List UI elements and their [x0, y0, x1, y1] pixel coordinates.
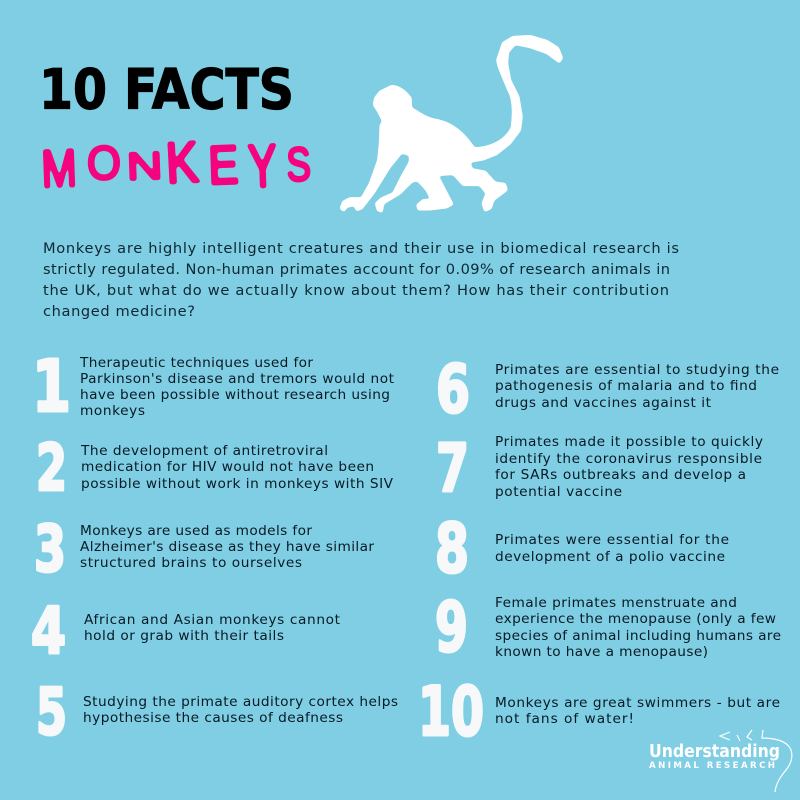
fact 7: [436, 430, 763, 507]
fact 1: monkeys: [80, 403, 145, 419]
fact 5: [36, 676, 398, 750]
fact 4: African and Asian monkeys cannot: [84, 612, 341, 628]
fact 2: possible without work in monkeys with SIV: [81, 476, 394, 492]
fact 4: hold or grab with their tails: [84, 628, 284, 644]
fact 8: 8: [435, 510, 469, 589]
fact 6: [436, 351, 779, 428]
fact 4: 4: [31, 595, 66, 669]
fact 6: Primates are essential to studying the: [495, 362, 779, 378]
fact 10: Monkeys are great swimmers - but are: [495, 695, 780, 711]
logo: Understanding Animal Research: [649, 730, 792, 792]
fact 6: drugs and vaccines against it: [495, 395, 712, 411]
fact 9: [435, 588, 781, 668]
fact 8: [435, 510, 729, 589]
fact 1: Therapeutic techniques used for: [79, 355, 313, 371]
intro text: the UK, but what do we actually know about them? How has their contribution: [43, 282, 669, 299]
intro text: Monkeys are highly intelligent creatures and their use in biomedical research is: [43, 240, 679, 257]
fact 9: Female primates menstruate and: [495, 595, 737, 611]
fact 3: structured brains to ourselves: [80, 555, 302, 571]
fact 10: not fans of water!: [495, 711, 634, 727]
intro text: [43, 240, 679, 320]
fact 3: [34, 513, 374, 587]
fact 1: have been possible without research using: [80, 387, 390, 403]
fact 2: [36, 432, 394, 506]
fact 10: [418, 673, 780, 752]
fact 7: potential vaccine: [495, 484, 622, 500]
fact 5: hypothesise the causes of deafness: [83, 710, 343, 726]
heading: monkeys: M: [40, 140, 78, 199]
fact 1: [32, 345, 395, 428]
fact 9: experience the menopause (only a few: [495, 611, 776, 627]
fact 6: 6: [436, 351, 470, 428]
heading: monkeys: S: [286, 138, 312, 191]
fact 7: for SARs outbreaks and develop a: [495, 467, 746, 483]
fact 1: Parkinson's disease and tremors would not: [80, 371, 395, 387]
fact 2: medication for HIV would not have been: [81, 459, 374, 475]
fact 6: pathogenesis of malaria and to find: [495, 378, 757, 394]
fact 7: 7: [436, 430, 469, 507]
intro text: strictly regulated. Non-human primates account for 0.09% of research animals in: [43, 261, 670, 278]
fact 10: 10: [418, 673, 484, 752]
icon: monkey silhouette: [341, 36, 562, 212]
fact 7: identify the coronavirus responsible: [495, 451, 762, 467]
fact 7: Primates made it possible to quickly: [495, 434, 763, 450]
heading: monkeys: Y: [247, 133, 278, 201]
fact 3: 3: [34, 513, 66, 587]
logo: Understanding Animal Research: Understanding: [649, 741, 780, 762]
title: 10 facts: 10 FACTS: [39, 58, 294, 122]
fact 5: Studying the primate auditory cortex helps: [83, 694, 398, 710]
fact 5: 5: [36, 676, 67, 750]
fact 3: Alzheimer's disease as they have similar: [80, 539, 374, 555]
fact 9: 9: [435, 588, 468, 668]
logo: Understanding Animal Research: ANIMAL RESEARCH: [649, 761, 775, 771]
heading: monkeys: O: [87, 136, 121, 189]
fact 1: 1: [32, 345, 71, 428]
fact 9: known to have a menopause): [495, 644, 708, 660]
heading: monkeys: [40, 131, 312, 201]
heading: monkeys: K: [164, 131, 200, 196]
fact 9: species of animal including humans are: [495, 628, 781, 644]
fact 2: 2: [36, 432, 67, 506]
intro text: changed medicine?: [43, 303, 195, 320]
fact 4: [31, 595, 341, 669]
fact 8: Primates were essential for the: [495, 532, 729, 548]
fact 3: Monkeys are used as models for: [80, 523, 312, 539]
heading: monkeys: E: [207, 134, 239, 196]
fact 8: development of a polio vaccine: [495, 549, 725, 565]
fact 2: The development of antiretroviral: [80, 443, 328, 459]
heading: monkeys: N: [126, 143, 163, 189]
